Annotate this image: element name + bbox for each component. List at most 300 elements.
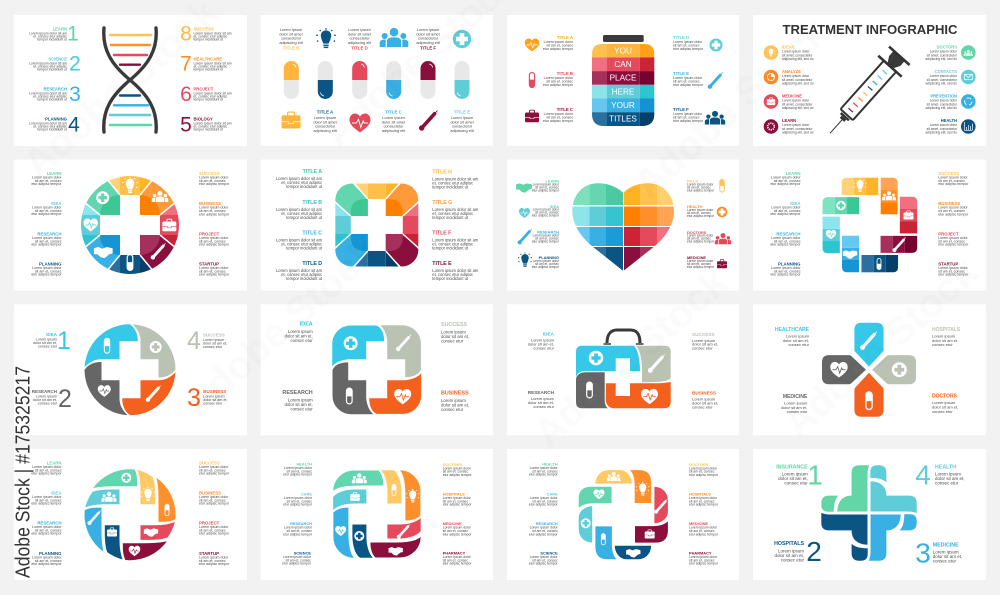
label: planning: Lorem ipsum dolor xyxy=(32,556,62,560)
label: medicine: Lorem ipsum xyxy=(933,550,959,555)
label: idea: etur adipisc tempor xyxy=(31,502,62,506)
label: learn: etur adipisc tempor xyxy=(532,188,560,192)
label: hospitals: HOSPITALS xyxy=(774,541,804,547)
label: title A: TITLE A xyxy=(557,35,573,40)
label: healthcare: consec etur xyxy=(788,342,810,347)
label: medicine: sit am et, consec xyxy=(443,529,468,533)
label: title E: et, consec etur adipisc xyxy=(432,272,473,277)
label: project xyxy=(938,232,969,247)
panel: medical case xyxy=(507,304,739,435)
label: contacts: adipiscing elit, sed do xyxy=(925,82,957,86)
label: doctors xyxy=(687,230,715,244)
label: research: sit am et, consec xyxy=(287,529,312,533)
label: success xyxy=(441,322,469,344)
label: idea: IDEA xyxy=(51,201,62,206)
label: idea: sit am et, consec xyxy=(35,209,62,213)
label: medicine: dolor sit am et, xyxy=(933,554,962,559)
label: project: et, consec etur adipisc xyxy=(194,94,228,98)
label: title F xyxy=(432,231,479,250)
label: research: consec etur xyxy=(290,406,313,412)
cross circle diagram xyxy=(84,324,176,416)
label: title F: Lorem ipsum dolor sit am xyxy=(432,237,479,242)
label: title C xyxy=(276,231,323,250)
label: success xyxy=(692,332,718,351)
label: pharmacy: sit am et, consec xyxy=(443,558,468,562)
label: research xyxy=(532,230,560,243)
label: title A: Lorem ipsum dolor xyxy=(544,40,574,44)
label: startup: STARTUP xyxy=(199,551,219,556)
icon: briefcase xyxy=(107,528,117,536)
label: healthcare: dolor sit am et, xyxy=(783,338,809,343)
label: idea xyxy=(285,322,313,343)
icon: briefcase xyxy=(645,530,655,538)
icon: people xyxy=(102,492,116,502)
icon: doctors xyxy=(961,45,976,60)
label: startup: etur adipisc tempor xyxy=(938,273,969,277)
label: project xyxy=(194,86,232,102)
label: care: etur adipisc tempor xyxy=(283,503,313,507)
label: startup: sit am et, consec xyxy=(938,269,965,273)
label: title B: TITLE B xyxy=(302,200,322,206)
label: title C: Lorem ipsum dolor xyxy=(544,112,574,116)
label: medicine: sit am et, consec xyxy=(689,529,715,533)
label: success: etur adipisc tempor xyxy=(938,182,969,186)
label: biology xyxy=(194,116,232,132)
label: doctors: sit am et, consec xyxy=(689,470,715,474)
label: learn: LEARN xyxy=(47,460,62,466)
label: startup xyxy=(199,262,230,277)
label: learn xyxy=(532,178,560,192)
icon: people xyxy=(705,111,725,124)
label: medicine: consec etur xyxy=(787,409,808,414)
label: title D: TITLE D xyxy=(673,35,689,40)
label: research: consec etur xyxy=(38,402,58,406)
icon: heart xyxy=(826,230,836,239)
icon: thermometer xyxy=(653,498,669,514)
label: project: Lorem ipsum dolor xyxy=(199,525,229,529)
label: healthcare: Lorem ipsum xyxy=(786,334,810,338)
label: success: Lorem ipsum xyxy=(692,338,716,343)
label: idea: sit am et, consec xyxy=(774,209,801,213)
number 4: 4 xyxy=(915,460,931,490)
label: title E: etur adipisc tempor xyxy=(673,83,704,87)
icon: heart xyxy=(84,219,98,231)
icon: plus xyxy=(581,518,591,528)
label: startup xyxy=(938,262,969,277)
icon: thermometer xyxy=(150,242,167,261)
label: planning: PLANNING xyxy=(39,262,62,266)
text: title F: Lorem ipsum xyxy=(417,27,439,32)
number 3: 3 xyxy=(915,538,931,568)
label: learn: LEARN xyxy=(782,118,796,123)
number 3: 3 xyxy=(69,83,81,106)
label: planning: sit am et, consec xyxy=(35,269,62,273)
text: title E: consectetur xyxy=(452,124,473,128)
label: title F: et, consec etur adipisc xyxy=(432,241,473,246)
label: doctors: DOCTORS xyxy=(932,394,958,400)
label: pharmacy: PHARMACY xyxy=(443,550,466,556)
icon: thermometer xyxy=(395,333,413,352)
panel: treatment infographic xyxy=(753,15,986,146)
label: research: dolor sit am et, xyxy=(285,402,313,407)
text: title F xyxy=(416,27,441,50)
label: pharmacy: Lorem ipsum dolor xyxy=(443,555,472,559)
label: title E: tempor incididunt ut xyxy=(432,276,469,281)
icon: pill xyxy=(165,504,169,516)
label: success: consec etur xyxy=(441,338,464,344)
label: title A xyxy=(543,35,574,51)
label: success: et, consec etur adipisc xyxy=(194,34,228,38)
label: planning: etur adipisc tempor xyxy=(31,562,62,566)
icon: pill xyxy=(719,179,725,192)
label: medicine xyxy=(687,255,715,269)
text: title B xyxy=(279,27,304,50)
text: title A: consectetur xyxy=(315,124,336,128)
jar text: TITLES xyxy=(609,114,637,124)
label: health: HEALTH xyxy=(542,462,558,466)
label: business: sit am et, consec xyxy=(199,209,226,213)
icon: briefcase xyxy=(525,110,539,122)
label: business: BUSINESS xyxy=(692,390,716,396)
jar text: YOU xyxy=(614,46,632,56)
text: title E: Lorem ipsum xyxy=(451,115,473,120)
label: business: dolor sit am et, xyxy=(441,402,469,408)
icon: thermometer xyxy=(707,71,724,90)
label: idea xyxy=(31,490,62,506)
label: planning: Lorem ipsum dolor xyxy=(771,266,801,270)
label: idea: Lorem ipsum xyxy=(288,329,313,334)
label: hospitals xyxy=(774,541,804,562)
label: health: sit amet, consectetur xyxy=(927,127,958,131)
label: doctors: Lorem ipsum dolor xyxy=(687,234,714,238)
label: hospitals: consec etur xyxy=(932,342,953,347)
label: business: BUSINESS xyxy=(199,490,221,496)
label: science: etur adipisc tempor xyxy=(282,562,312,566)
icon: ideas xyxy=(764,45,778,60)
label: success: Lorem ipsum xyxy=(441,330,466,334)
label: research: RESEARCH xyxy=(537,230,559,234)
label: research: RESEARCH xyxy=(290,521,312,526)
label: ideas: IDEAS xyxy=(782,44,795,50)
number 7: 7 xyxy=(180,52,192,76)
label: insurance xyxy=(776,464,808,486)
ribbon cross diagram xyxy=(821,465,917,561)
icon: thermometer xyxy=(647,353,666,374)
label: project: etur adipisc tempor xyxy=(938,243,969,247)
icon: medicine xyxy=(764,94,778,109)
label: research xyxy=(31,232,62,247)
label: research: RESEARCH xyxy=(37,232,62,236)
label: title E: sit am et, consec xyxy=(673,80,700,84)
label: success: sit am et, consec xyxy=(938,179,965,183)
cross square diagram xyxy=(332,325,422,415)
label: science: tempor incididunt ut xyxy=(37,68,67,72)
label: title D: Lorem ipsum dolor sit am xyxy=(276,268,323,273)
text: title E: adipiscing elit xyxy=(450,128,475,133)
label: learn: LEARN xyxy=(53,26,67,32)
label: title A xyxy=(276,169,323,189)
label: care xyxy=(283,492,313,507)
icon: briefcase xyxy=(350,492,360,501)
label: healthcare: HEALTHCARE xyxy=(775,327,810,333)
label: business: dolor sit am et, xyxy=(203,398,227,402)
label: learn: etur adipisc tempor xyxy=(31,182,62,186)
panel: swirl square xyxy=(260,449,493,580)
label: business: etur adipisc tempor xyxy=(199,212,230,216)
label: project: PROJECT xyxy=(194,86,214,92)
label: success xyxy=(194,26,232,42)
icon: prevention xyxy=(961,94,976,109)
text: title A: Lorem ipsum xyxy=(314,115,336,120)
label: hospitals: consec etur xyxy=(781,558,804,562)
label: title G: tempor incididunt ut xyxy=(432,215,469,220)
jar text: HERE xyxy=(612,88,635,96)
label: title H: tempor incididunt ut xyxy=(432,184,469,189)
label: pharmacy: Lorem ipsum dolor xyxy=(689,555,718,559)
label: research: Lorem ipsum dolor xyxy=(284,526,313,530)
icon: heart xyxy=(350,114,370,132)
icon: thermometer xyxy=(892,236,907,253)
label: pharmacy: etur adipisc tempor xyxy=(689,562,719,566)
icon: plus xyxy=(344,336,358,350)
label: idea: IDEA xyxy=(51,490,62,496)
label: doctors: Lorem ipsum dolor xyxy=(443,466,472,470)
label: title F: Lorem ipsum dolor xyxy=(673,112,703,116)
case section: grey xyxy=(636,346,671,382)
icon: heart xyxy=(594,489,604,499)
icon: pill xyxy=(586,382,593,398)
label: health: consec etur xyxy=(935,480,959,485)
label: planning xyxy=(29,116,67,132)
number 8: 8 xyxy=(180,22,192,46)
icon: bulb xyxy=(122,177,138,193)
label: research: RESEARCH xyxy=(776,232,800,236)
jar lid xyxy=(603,35,644,42)
icon: people xyxy=(380,28,408,47)
icon: thermometer xyxy=(517,228,533,245)
label: research xyxy=(283,521,313,536)
text: title C: TITLE C xyxy=(385,110,403,114)
label: healthcare xyxy=(194,56,232,72)
watermark xyxy=(15,0,987,456)
number 2: 2 xyxy=(58,385,72,413)
number 4: 4 xyxy=(187,327,201,355)
label: science: sit am et, consec xyxy=(532,558,558,562)
label: learn: sit amet, consectetur xyxy=(782,127,813,131)
label: business: Lorem ipsum xyxy=(692,396,716,402)
label: title B: Lorem ipsum dolor xyxy=(544,76,574,80)
label: hospitals xyxy=(689,492,719,507)
label: learn: adipiscing elit, sed do xyxy=(782,130,814,134)
number 1: 1 xyxy=(807,460,823,490)
icon: contacts xyxy=(961,70,976,84)
label: hospitals: Lorem ipsum dolor xyxy=(443,496,472,500)
label: learn xyxy=(31,460,62,476)
icon: heart xyxy=(519,208,530,218)
text: title D: consectetur xyxy=(349,36,370,41)
label: startup: sit am et, consec xyxy=(199,559,226,563)
label: title B: Lorem ipsum dolor sit am xyxy=(276,207,323,212)
label: hospitals: sit am et, consec xyxy=(689,499,715,503)
text: title E: dolor sit amet xyxy=(450,119,475,124)
label: planning xyxy=(31,262,62,277)
label: medicine: etur adipisc tempor xyxy=(687,265,715,269)
icon: plus xyxy=(892,362,907,377)
label: hospitals: Lorem ipsum xyxy=(932,334,956,338)
label: planning xyxy=(770,262,801,277)
label: doctors: Lorem ipsum xyxy=(932,400,956,405)
label: project xyxy=(199,520,230,536)
icon: handshake xyxy=(843,250,857,259)
label: health: dolor sit am et, xyxy=(935,476,965,481)
label: business: consec etur xyxy=(441,407,464,412)
label: idea: dolor sit am et, xyxy=(33,341,57,345)
text: title A xyxy=(313,110,338,133)
number 1: 1 xyxy=(57,327,71,355)
label: project: Lorem ipsum dolor sit am xyxy=(194,91,232,95)
icon: people xyxy=(152,191,168,202)
label: business: BUSINESS xyxy=(203,389,226,394)
label: research: dolor sit am et, xyxy=(33,398,57,402)
label: idea: etur adipisc tempor xyxy=(31,212,62,216)
number 4: 4 xyxy=(68,114,80,136)
label: learn: tempor incididunt ut xyxy=(37,38,67,42)
case section: orange xyxy=(606,382,671,408)
icon: briefcase xyxy=(717,259,727,268)
number 2: 2 xyxy=(69,52,81,76)
label: success: etur adipisc tempor xyxy=(199,472,230,476)
label: idea: Lorem ipsum dolor xyxy=(32,206,62,210)
label: doctors: DOCTORS xyxy=(687,230,707,235)
text: title F: TITLE F xyxy=(420,46,436,50)
label: title E xyxy=(673,71,704,87)
label: success: Lorem ipsum dolor xyxy=(938,176,968,180)
label: success xyxy=(199,171,230,186)
jar text xyxy=(609,46,637,124)
label: research: etur adipisc tempor xyxy=(31,532,62,536)
label: success: dolor sit am et, xyxy=(203,342,227,346)
panel: heart xyxy=(507,160,739,290)
label: health: HEALTH xyxy=(941,118,957,123)
label: pills: etur adipisc tempor xyxy=(687,188,715,192)
label: idea: consec etur xyxy=(533,345,555,350)
label: healthcare: HEALTHCARE xyxy=(194,56,222,62)
label: title C: TITLE C xyxy=(557,107,573,112)
icon: thermometer xyxy=(418,109,440,132)
label: insurance: consec etur xyxy=(784,480,808,485)
label: medicine xyxy=(782,94,814,110)
text: title C: consectetur xyxy=(383,124,404,128)
number 6: 6 xyxy=(180,83,192,106)
icon: pill xyxy=(877,258,881,270)
label: idea: Lorem ipsum xyxy=(531,338,555,342)
label: planning: Lorem ipsum dolor xyxy=(32,266,62,270)
text: title C: dolor sit amet xyxy=(382,119,406,124)
icon: people xyxy=(715,233,731,244)
label: research: sit am et, consec xyxy=(532,529,558,533)
icon: plus xyxy=(589,351,603,365)
label: project: Lorem ipsum dolor xyxy=(199,236,229,240)
label: success: dolor sit am et, xyxy=(692,342,718,347)
label: title C: etur adipisc tempor xyxy=(543,119,574,123)
label: learn: LEARN xyxy=(546,178,559,184)
text: title B: TITLE B xyxy=(283,46,299,50)
label: research: RESEARCH xyxy=(282,390,313,396)
label: care xyxy=(529,492,559,507)
label: title E xyxy=(432,261,479,281)
label: research: tempor incididunt ut xyxy=(37,98,67,102)
label: success: sit am et, consec xyxy=(199,179,226,183)
icon: heart xyxy=(394,389,411,404)
text: title B: consectetur xyxy=(281,36,302,41)
label: title H xyxy=(432,170,479,189)
icon: pill xyxy=(127,254,133,271)
label: insurance: INSURANCE xyxy=(776,464,808,470)
icon: people xyxy=(882,191,896,200)
text: title C xyxy=(382,110,406,133)
label: learn xyxy=(31,171,62,186)
label: health: HEALTH xyxy=(935,464,956,470)
label: startup: etur adipisc tempor xyxy=(199,273,230,277)
label: project: sit am et, consec xyxy=(199,239,226,243)
label: business: sit am et, consec xyxy=(938,209,965,213)
label: planning: PLANNING xyxy=(39,551,62,556)
label: idea: sit am et, consec xyxy=(35,498,62,502)
label: research: Lorem ipsum xyxy=(36,395,57,399)
text: title E xyxy=(450,110,475,133)
label: title G: TITLE G xyxy=(432,200,452,206)
label: science xyxy=(529,550,559,566)
label: science: Lorem ipsum dolor xyxy=(283,555,312,559)
icon: plus xyxy=(717,207,727,217)
label: business: etur adipisc tempor xyxy=(938,212,969,216)
label: biology: Lorem ipsum dolor sit am xyxy=(194,121,232,125)
label: title D xyxy=(276,261,323,281)
text: title A: TITLE A xyxy=(317,110,334,114)
label: doctors: DOCTORS xyxy=(689,462,709,467)
jar body xyxy=(592,44,655,126)
pill row xyxy=(284,61,470,99)
label: idea: dolor sit am et, xyxy=(528,341,554,346)
text: title D: adipiscing elit xyxy=(348,40,372,45)
label: hospitals: Lorem ipsum dolor xyxy=(689,496,718,500)
label: learn: et, consec etur adipisc xyxy=(33,34,67,38)
label: business: Lorem ipsum xyxy=(441,398,466,403)
label: healthcare: Lorem ipsum dolor sit am xyxy=(194,61,232,65)
label: health: Lorem ipsum dolor xyxy=(530,466,559,470)
label: care: Lorem ipsum dolor xyxy=(530,496,559,500)
label: business: dolor sit am et, xyxy=(692,400,718,405)
label: science: SCIENCE xyxy=(294,550,311,556)
label: learn: sit am et, consec xyxy=(35,468,62,472)
icon: pill xyxy=(104,338,110,354)
label: research xyxy=(282,390,313,412)
label: analyze: Lorem ipsum dolor xyxy=(782,74,810,78)
label: business xyxy=(441,390,469,412)
label: learn: Lorem ipsum dolor xyxy=(771,176,801,180)
label: idea: IDEA xyxy=(46,332,58,337)
label: business: Lorem ipsum dolor xyxy=(199,495,229,499)
label: care: CARE xyxy=(547,492,558,496)
label: healthcare xyxy=(775,327,810,347)
label: startup: STARTUP xyxy=(199,262,219,266)
label: idea xyxy=(770,201,801,216)
label: contacts xyxy=(925,69,958,86)
label: research: etur adipisc tempor xyxy=(283,532,313,536)
label: science: etur adipisc tempor xyxy=(529,562,559,566)
label: biology: tempor incididunt ut xyxy=(194,128,223,132)
label: title H: Lorem ipsum dolor sit am xyxy=(432,176,479,181)
